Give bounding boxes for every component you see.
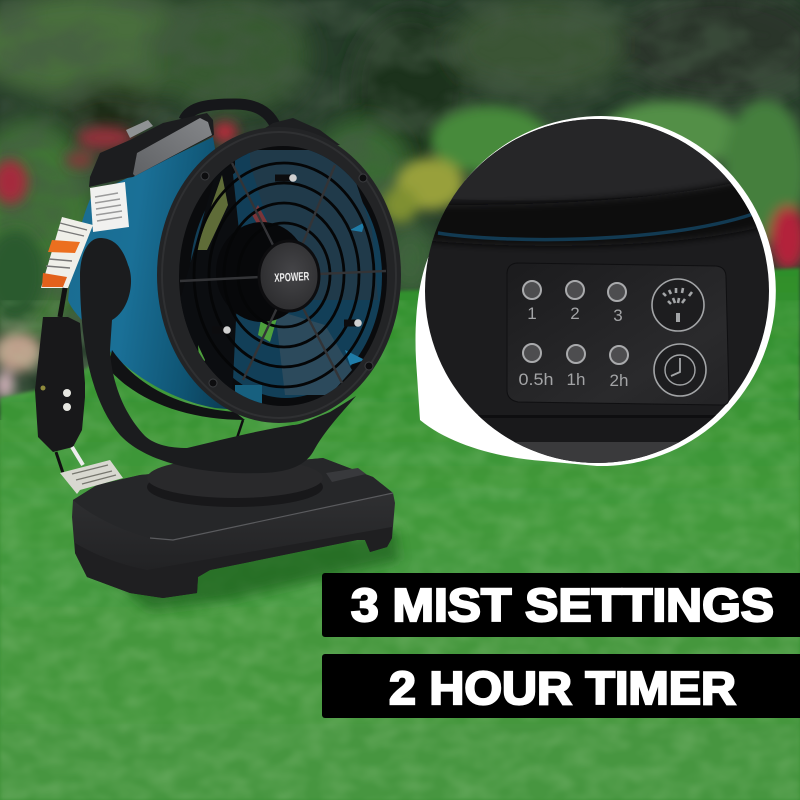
banner: 3 mist settings xyxy=(322,573,800,637)
timer labels: 0.5h xyxy=(518,370,554,389)
product: XPOWER misting fan xyxy=(35,104,401,598)
icon: timer clock button xyxy=(654,344,706,396)
mist level indicators xyxy=(523,281,626,301)
icon: mist spray button xyxy=(652,279,704,331)
turntable xyxy=(147,458,323,507)
callout white bubble xyxy=(416,116,776,466)
ring screws xyxy=(201,172,373,387)
top control panel xyxy=(89,113,214,187)
power cord xyxy=(237,420,243,438)
mist level labels xyxy=(527,304,623,325)
hub with logo xyxy=(259,241,319,311)
carry handle xyxy=(184,104,276,127)
hub with logo: XPOWER xyxy=(274,269,310,285)
control panel plate xyxy=(507,263,729,405)
wire grille xyxy=(180,163,386,387)
timer labels xyxy=(518,370,628,390)
rating sticker xyxy=(90,182,129,232)
timer labels: 2h xyxy=(610,371,628,390)
GFCI plug xyxy=(35,288,85,473)
base xyxy=(72,458,395,598)
timer indicators xyxy=(523,344,628,364)
callout dark surface xyxy=(420,110,780,472)
banner: 2 hour timer xyxy=(322,654,800,718)
blue seam line xyxy=(438,214,753,240)
grille bolts xyxy=(212,174,362,334)
fan front ring xyxy=(157,118,401,423)
banner: 2 hour timer: 2 HOUR TIMER xyxy=(389,662,736,714)
fan interior xyxy=(180,145,382,405)
fan housing: blue body xyxy=(68,137,260,412)
warning tag on cord xyxy=(41,217,93,288)
cord tag xyxy=(60,460,123,494)
zoomed callout: control panel detail xyxy=(416,110,780,472)
mist level labels: 2 xyxy=(570,304,580,323)
timer labels: 1h xyxy=(567,370,585,389)
banner: 3 mist settings: 3 MIST SETTINGS xyxy=(351,579,774,631)
ground shadow under base xyxy=(90,530,400,610)
mist level labels: 3 xyxy=(613,306,623,325)
yoke bracket xyxy=(80,238,356,473)
mist level labels: 1 xyxy=(527,304,537,323)
